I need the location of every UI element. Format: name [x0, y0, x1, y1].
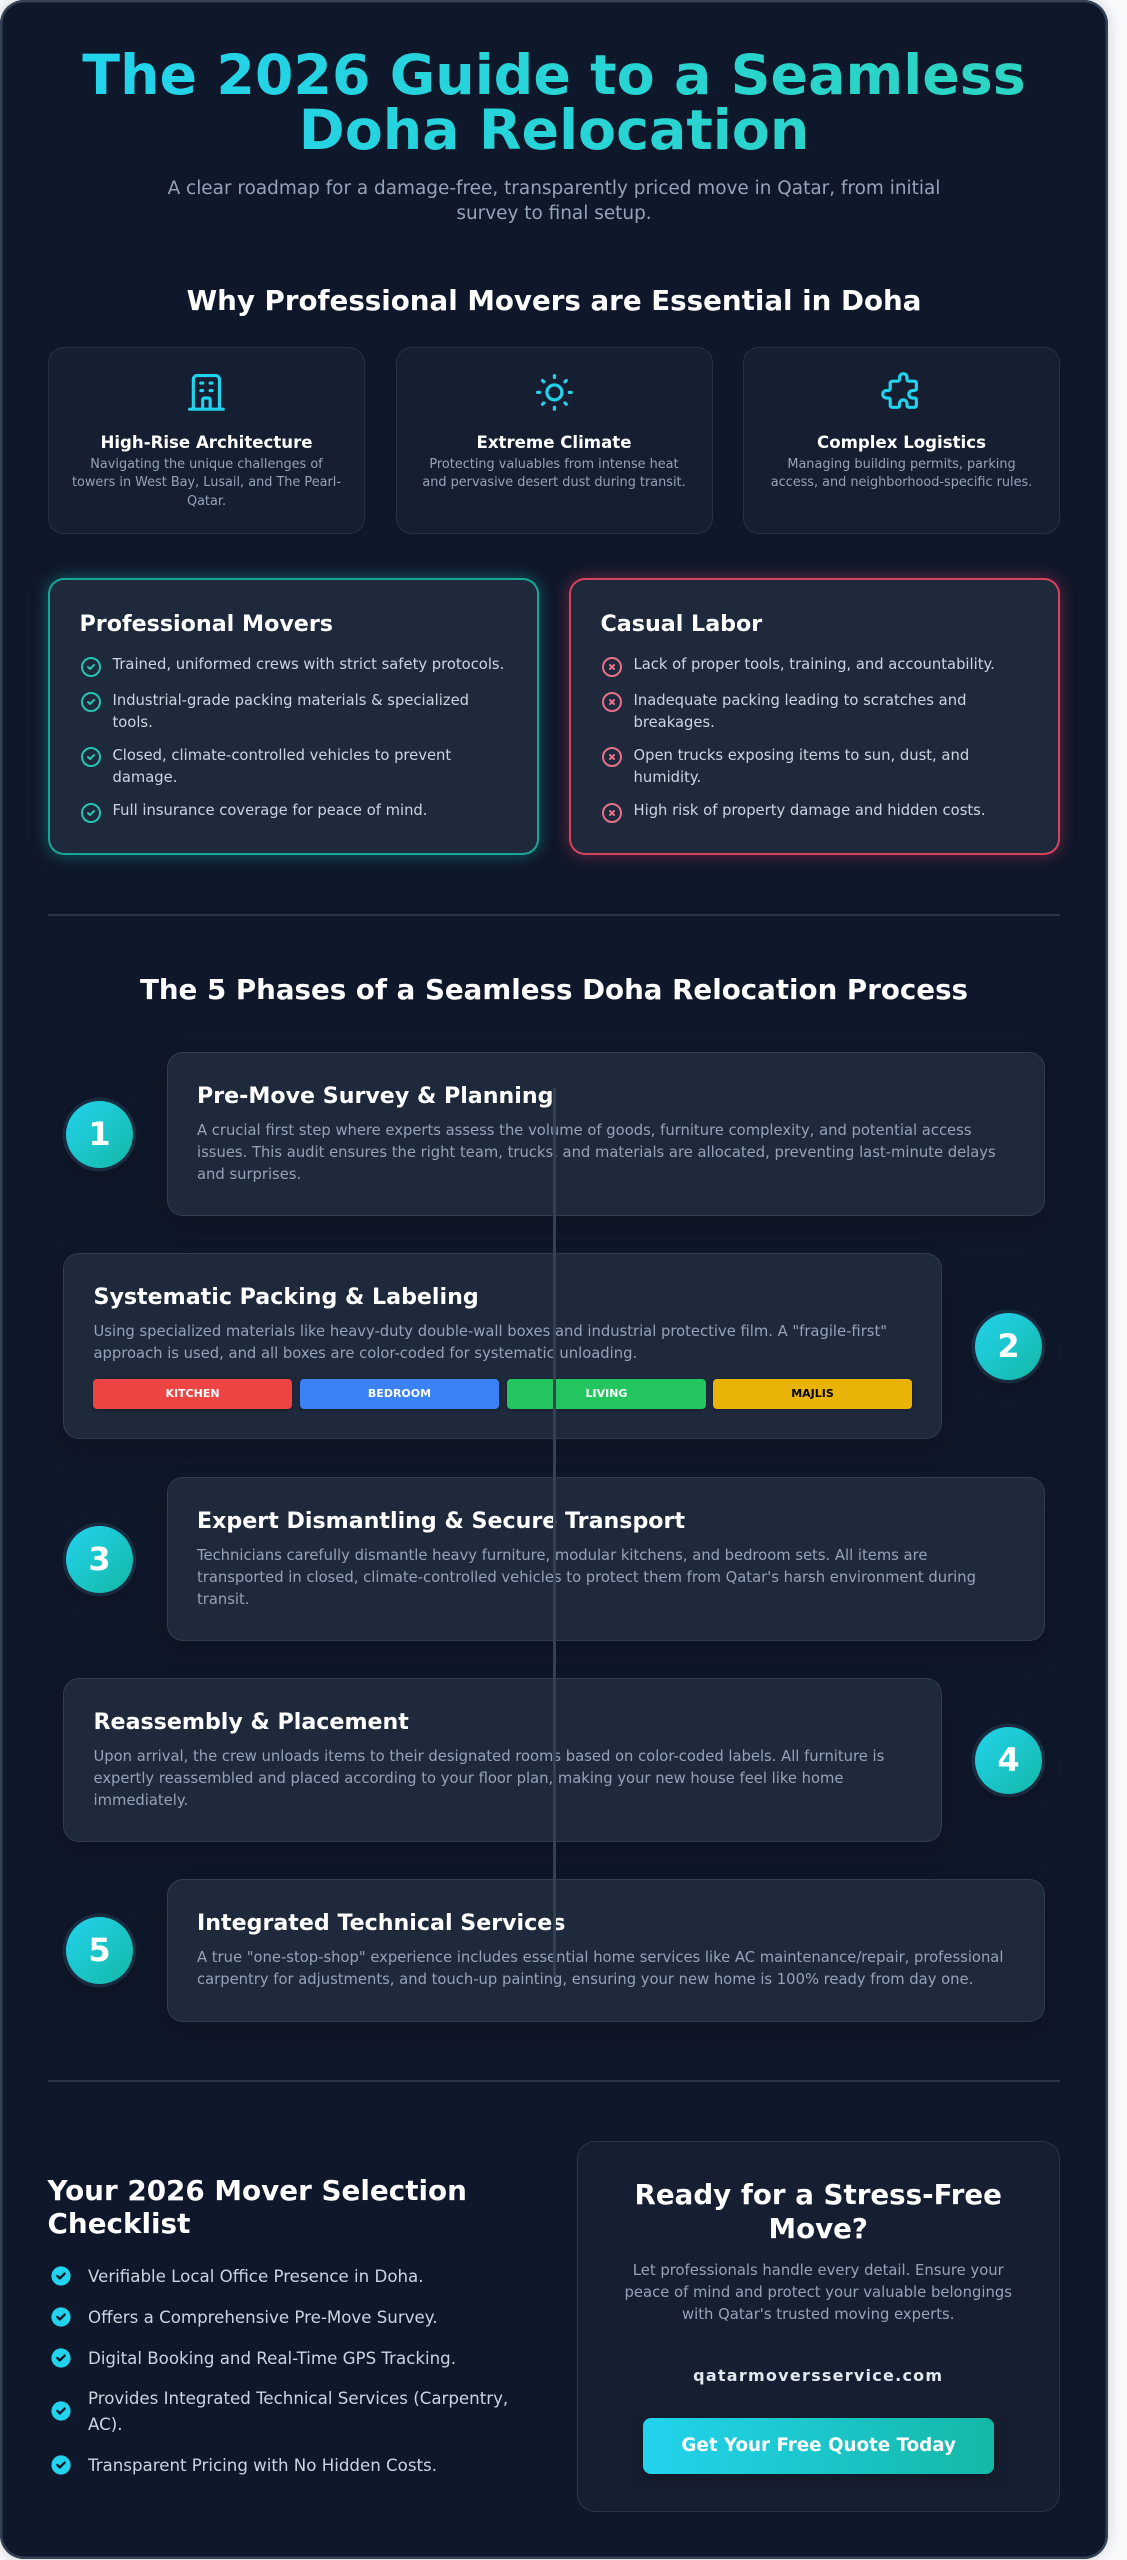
card description: Navigating the unique challenges of	[90, 457, 323, 472]
phase 2 number	[975, 1312, 1042, 1380]
phase description: issues. This audit ensures the right team, trucks, and materials are allocated, preventing last-minute delays	[197, 1144, 996, 1161]
list item: Inadequate packing leading to scratches and	[634, 692, 966, 709]
heading: checklist: Your 2026 Mover Selection	[48, 2174, 467, 2207]
panel heading: Professional Movers	[80, 611, 333, 637]
checklist	[51, 2266, 508, 2475]
timeline connector line	[552, 1088, 556, 1977]
checklist item: Verifiable Local Office Presence in Doha.	[88, 2266, 424, 2286]
title: The 2026 Guide to a Seamless	[82, 44, 1026, 108]
phase description: transit.	[197, 1591, 250, 1608]
phase description: transported in closed, climate-controlled vehicles to protect them from Qatar's harsh environment during	[197, 1569, 976, 1586]
cta heading: Move?	[769, 2212, 868, 2245]
subtitle	[168, 178, 940, 224]
subtitle: A clear roadmap for a damage-free, transparently priced move in Qatar, from initial	[168, 178, 940, 199]
panel: complex logistics	[743, 347, 1060, 534]
subtitle: survey to final setup.	[456, 203, 652, 224]
cta description: peace of mind and protect your valuable belongings	[625, 2284, 1012, 2301]
list item	[81, 692, 469, 731]
label: living	[507, 1379, 706, 1409]
list item: Industrial-grade packing materials & specialized	[112, 692, 469, 709]
icon: building	[188, 374, 225, 411]
card title: Complex Logistics	[817, 433, 986, 452]
card description: Protecting valuables from intense heat	[429, 457, 679, 472]
phase description: Upon arrival, the crew unloads items to their designated rooms based on color-coded labels. All furniture is	[94, 1748, 884, 1765]
phase 2 number: 2	[997, 1326, 1020, 1364]
label: kitchen: KITCHEN	[165, 1387, 220, 1400]
cta description: with Qatar's trusted moving experts.	[682, 2306, 954, 2323]
list item: breakages.	[634, 714, 715, 731]
label: majlis: MAJLIS	[791, 1387, 834, 1400]
phase description: approach is used, and all boxes are color-coded for systematic unloading.	[94, 1345, 637, 1362]
card description: and pervasive desert dust during transit.	[422, 475, 686, 490]
list item	[602, 747, 969, 786]
label: kitchen	[93, 1379, 292, 1409]
phase description: expertly reassembled and placed according to your floor plan, making your new house feel like home	[94, 1770, 843, 1787]
phase description	[197, 1949, 1003, 1988]
panel: call to action	[576, 2141, 1060, 2512]
checklist item: Offers a Comprehensive Pre-Move Survey.	[88, 2308, 438, 2326]
phase title: Systematic Packing & Labeling	[94, 1284, 479, 1310]
phase description: Technicians carefully dismantle heavy furniture, modular kitchens, and bedroom sets. All items are	[197, 1547, 927, 1564]
card title: Extreme Climate	[477, 433, 631, 452]
list item: Full insurance coverage for peace of mind.	[112, 802, 427, 819]
card description: access, and neighborhood-specific rules.	[771, 475, 1032, 490]
phase title: Reassembly & Placement	[94, 1709, 409, 1735]
cta description	[625, 2262, 1012, 2323]
label: living: LIVING	[586, 1387, 627, 1400]
phase 1 card	[166, 1052, 1044, 1216]
phase description: A true "one-stop-shop" experience includes essential home services like AC maintenance/repair, professional	[197, 1949, 1003, 1966]
cta heading	[635, 2178, 1002, 2245]
title: Doha Relocation	[299, 99, 809, 163]
phase description: carpentry for adjustments, and touch-up painting, ensuring your new home is 100% ready from day one.	[197, 1971, 973, 1988]
card description	[72, 457, 341, 509]
phase description: A crucial first step where experts assess the volume of goods, furniture complexity, and potential access	[197, 1122, 972, 1139]
panel: casual labor	[569, 578, 1060, 855]
card title: High-Rise Architecture	[100, 433, 313, 452]
phase 4 number	[975, 1726, 1042, 1794]
checklist item: Provides Integrated Technical Services (Carpentry,	[88, 2389, 508, 2408]
phase 4 number: 4	[997, 1740, 1020, 1778]
phase 5 number	[66, 1917, 133, 1984]
website url: qatarmoversservice.com	[693, 2366, 943, 2384]
card description	[422, 457, 686, 490]
icon: sun	[536, 374, 573, 411]
heading: checklist: Checklist	[48, 2207, 190, 2240]
list item	[602, 692, 966, 731]
list item: Closed, climate-controlled vehicles to prevent	[112, 747, 451, 764]
phase description	[197, 1122, 996, 1183]
title	[48, 49, 1060, 160]
phase 4 card	[63, 1678, 942, 1842]
label: majlis	[713, 1379, 912, 1409]
cta button: Get Your Free Quote Today	[681, 2435, 956, 2456]
panel heading: Casual Labor	[600, 611, 762, 637]
list item	[81, 747, 451, 786]
phase title: Integrated Technical Services	[197, 1910, 565, 1936]
card description: towers in West Bay, Lusail, and The Pearl-	[72, 475, 341, 490]
heading: checklist	[47, 2174, 467, 2240]
phase description: and surprises.	[197, 1166, 301, 1183]
phase 3 number	[66, 1526, 133, 1592]
checklist item: Digital Booking and Real-Time GPS Tracking.	[88, 2348, 456, 2368]
list item: damage.	[112, 769, 177, 786]
card description: Qatar.	[187, 494, 226, 509]
phase description: Using specialized materials like heavy-duty double-wall boxes and industrial protective film. A "fragile-first"	[94, 1323, 887, 1340]
list item: humidity.	[634, 769, 701, 786]
cta description: Let professionals handle every detail. Ensure your	[633, 2262, 1004, 2279]
heading: why professional movers: Why Professional Movers are Essential in Doha	[187, 284, 921, 317]
phase description	[94, 1323, 887, 1362]
phase 3 card	[166, 1477, 1044, 1641]
phase title: Expert Dismantling & Secure Transport	[197, 1508, 685, 1534]
panel: extreme climate	[396, 347, 712, 534]
label: bedroom	[300, 1379, 499, 1409]
phase title: Pre-Move Survey & Planning	[197, 1083, 553, 1109]
list item: Trained, uniformed crews with strict safety protocols.	[112, 656, 504, 673]
panel: high-rise architecture	[48, 347, 365, 534]
cta heading: Ready for a Stress-Free	[635, 2178, 1002, 2211]
phase 5 card	[166, 1879, 1044, 2022]
label: bedroom: BEDROOM	[368, 1387, 431, 1400]
list item: Open trucks exposing items to sun, dust, and	[634, 747, 969, 764]
checklist item: AC).	[88, 2415, 122, 2434]
list item: High risk of property damage and hidden costs.	[634, 802, 986, 819]
phase 1 number	[66, 1100, 133, 1168]
card description: Managing building permits, parking	[787, 457, 1016, 472]
phase 2 card	[63, 1253, 942, 1439]
phase 3 number: 3	[88, 1540, 111, 1578]
phase description: immediately.	[94, 1792, 188, 1809]
phase description	[94, 1748, 884, 1809]
panel: professional movers	[48, 578, 539, 855]
list item: tools.	[112, 714, 153, 731]
icon: puzzle piece	[881, 372, 918, 409]
list item: Lack of proper tools, training, and accountability.	[634, 656, 995, 673]
phase 5 number: 5	[88, 1931, 111, 1969]
cta button	[643, 2418, 994, 2474]
checklist item: Transparent Pricing with No Hidden Costs.	[88, 2456, 437, 2474]
phase 1 number: 1	[88, 1114, 111, 1152]
heading: five phases: The 5 Phases of a Seamless Doha Relocation Process	[140, 973, 968, 1006]
card description	[771, 457, 1032, 490]
checklist item	[51, 2389, 508, 2434]
phase description	[196, 1547, 976, 1608]
